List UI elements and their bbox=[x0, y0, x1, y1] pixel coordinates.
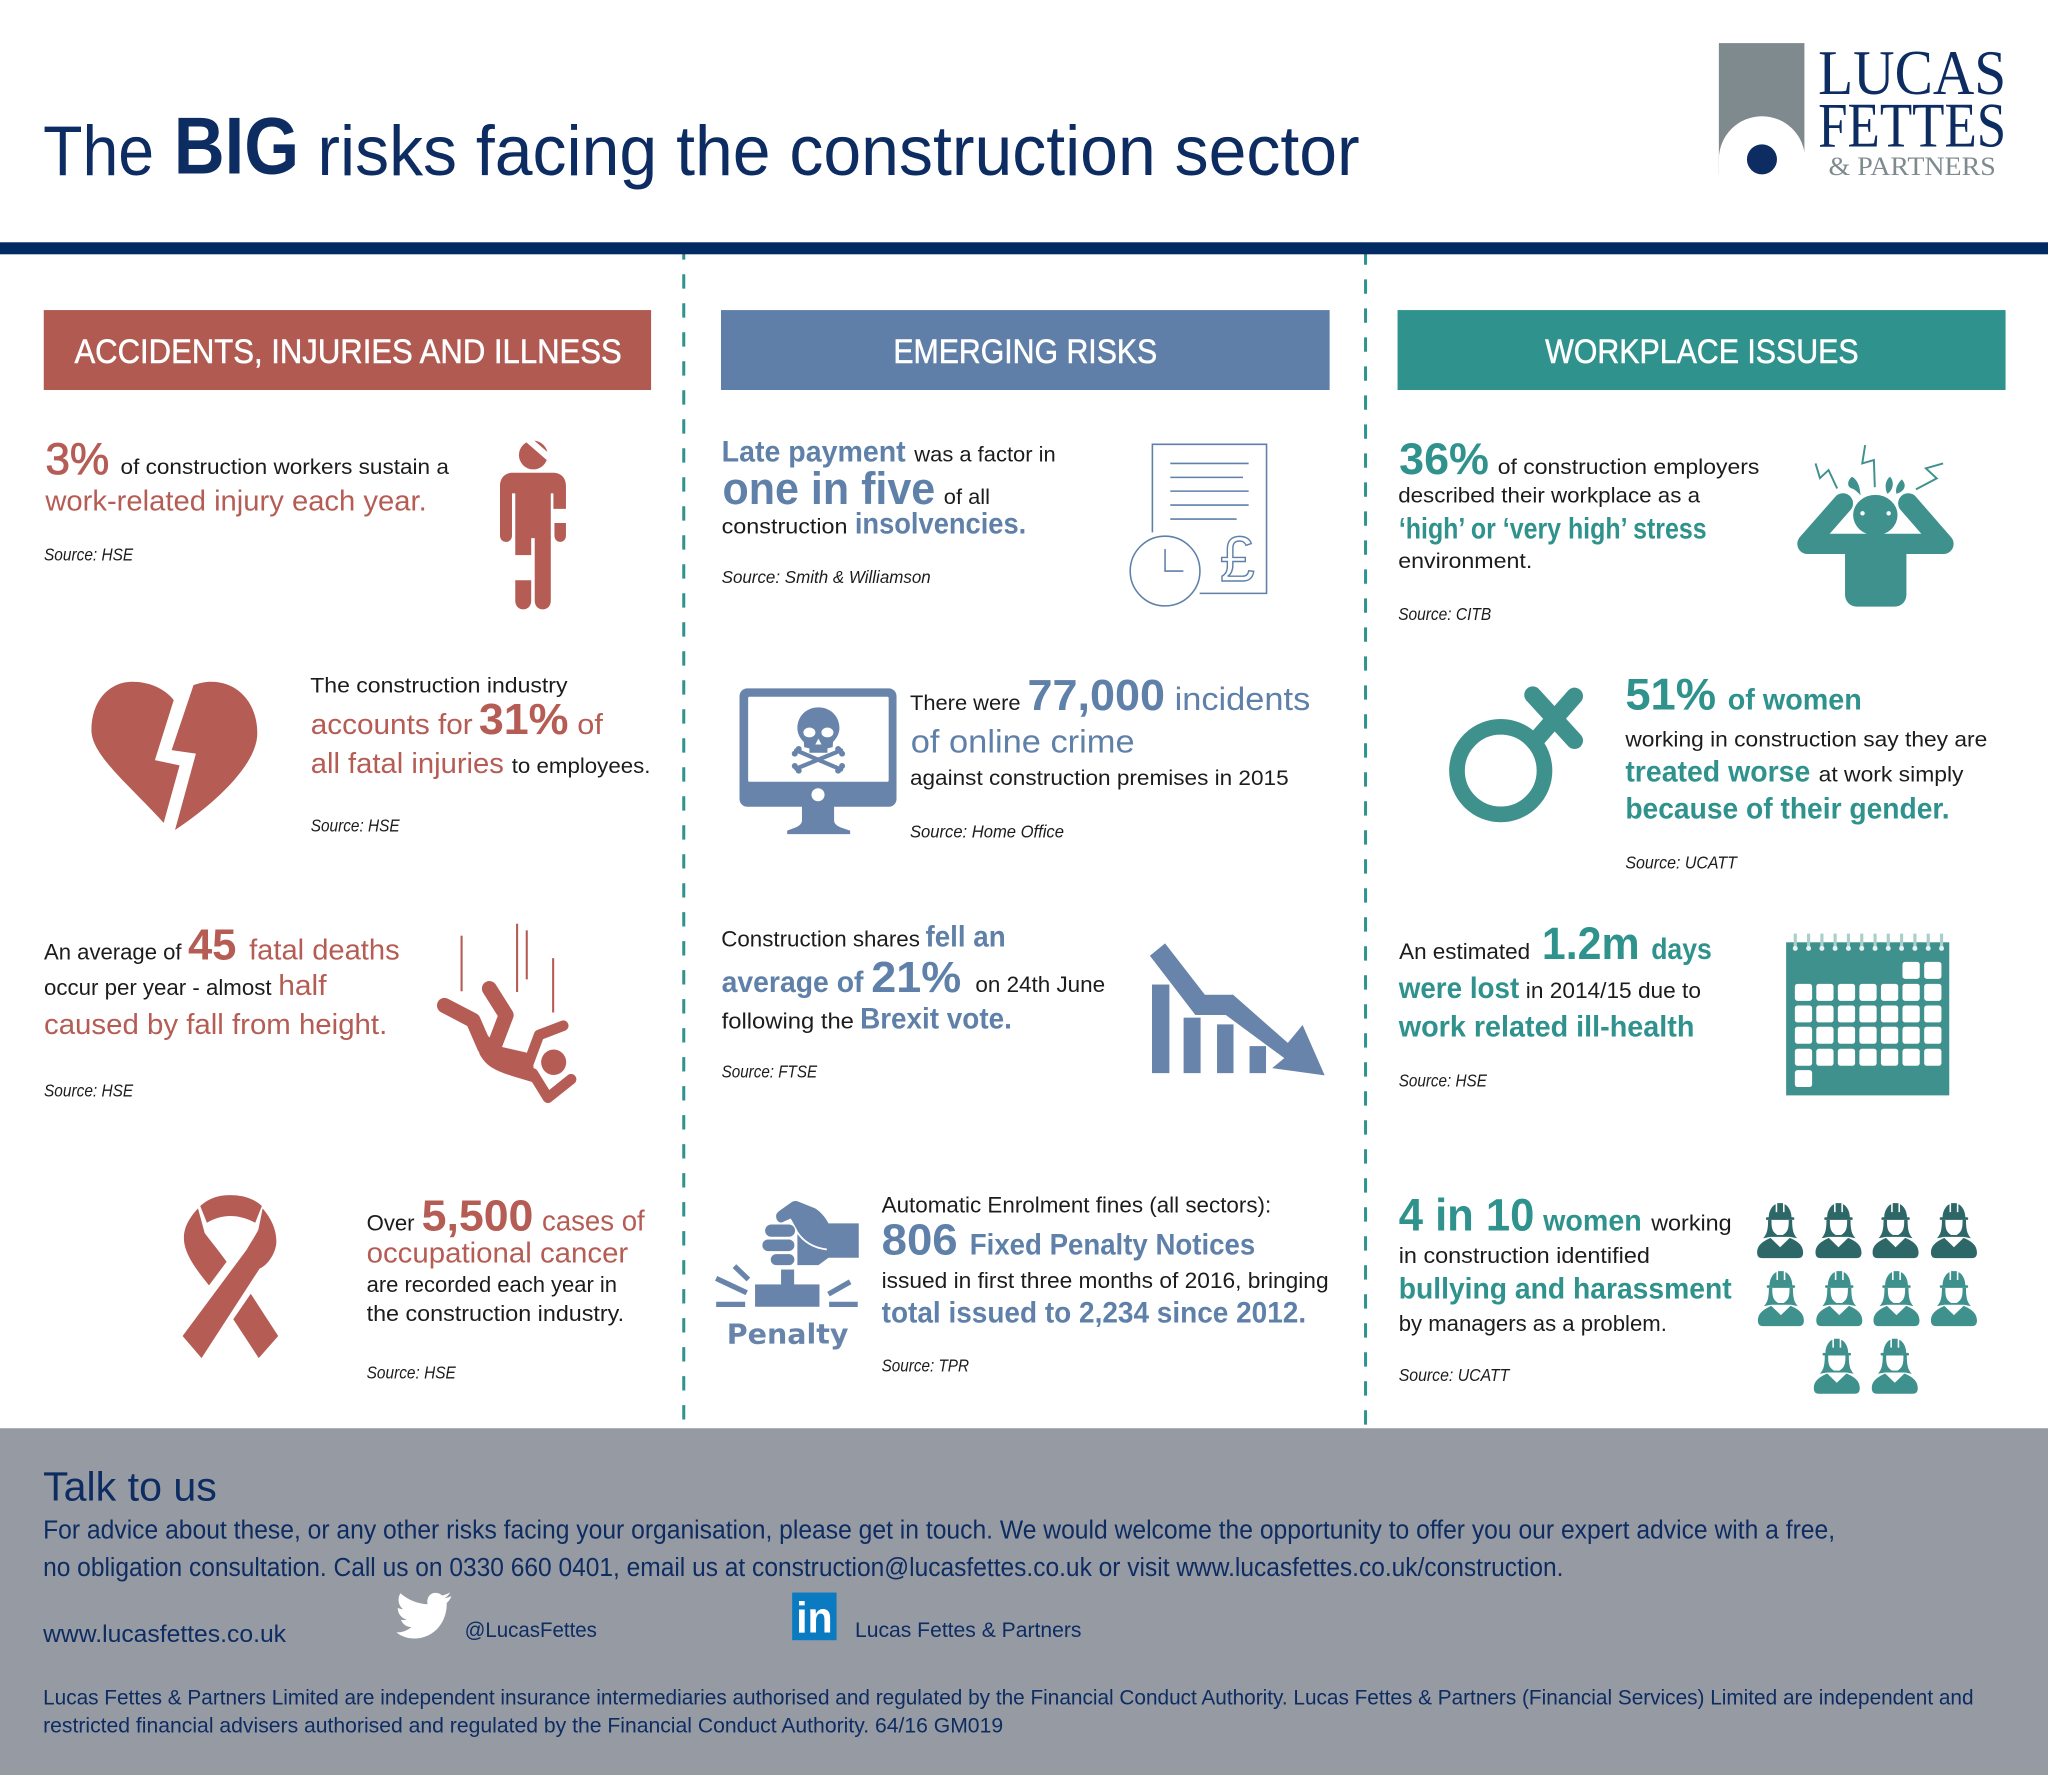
icon: twitter bird bbox=[396, 1593, 452, 1639]
panel: workplace issues bbox=[1398, 310, 2006, 1394]
stat: 1.2m days lost: in 2014/15 due to bbox=[1526, 978, 1701, 1003]
stat: 36% high stress: ‘high’ or ‘very high’ stress bbox=[1399, 512, 1707, 545]
stat: 5,500 cancer cases: Source: HSE bbox=[367, 1362, 456, 1382]
stat: 5,500 cancer cases: cases of bbox=[542, 1205, 646, 1238]
stat: late payment bbox=[722, 436, 1056, 587]
navy divider bar bbox=[0, 242, 2048, 254]
stat: 77,000 online crime: 77,000 bbox=[1028, 672, 1165, 720]
stat: 51% of women bbox=[1624, 670, 1987, 872]
stat: 21% share fall: 21% bbox=[871, 954, 961, 1002]
linkedin name: Lucas Fettes & Partners bbox=[855, 1617, 1081, 1642]
stat: late payment: construction bbox=[722, 513, 848, 538]
stat: 21% share fall: average of bbox=[722, 966, 864, 999]
stat: 3% injury: work-related injury each year. bbox=[44, 486, 427, 518]
icon: falling bar chart with arrow bbox=[1150, 943, 1325, 1075]
stat: 4 in 10 women: in construction identified bbox=[1399, 1243, 1650, 1268]
title: risks facing the construction sector bbox=[317, 111, 1360, 190]
heading: workplace issues: WORKPLACE ISSUES bbox=[1545, 333, 1859, 371]
stat: 77,000 online crime: Source: Home Office bbox=[910, 821, 1064, 841]
column divider left bbox=[683, 245, 685, 1428]
stat: 3% injury: 3% bbox=[45, 435, 109, 484]
stat: 1.2m days lost: An estimated bbox=[1399, 939, 1530, 964]
icon: broken heart bbox=[91, 682, 257, 830]
stat: 4 in 10 women bbox=[1399, 1191, 1732, 1385]
icon: falling person bbox=[444, 924, 571, 1098]
icon: female symbol bbox=[1457, 695, 1575, 814]
stat: 4 in 10 women: working bbox=[1650, 1210, 1732, 1236]
logo: Lucas Fettes & Partners: LUCAS bbox=[1818, 37, 2006, 108]
stat: 45 fatal deaths: 45 bbox=[188, 921, 236, 970]
stat: 36% high stress: described their workplace as a bbox=[1398, 483, 1700, 508]
contact paragraph bbox=[43, 1516, 1835, 1582]
stat: 4 in 10 women: bullying and harassment bbox=[1399, 1272, 1732, 1305]
stat: late payment: Source: Smith & Williamson bbox=[722, 567, 931, 587]
stat: 4 in 10 women: women bbox=[1542, 1204, 1642, 1238]
heading: accidents: ACCIDENTS, INJURIES AND ILLNESS bbox=[74, 333, 622, 371]
icon: awareness ribbon bbox=[183, 1195, 278, 1358]
stat: 36% high stress: 36% bbox=[1399, 435, 1489, 484]
stat: 51% of women: of women bbox=[1728, 683, 1862, 716]
icon: linkedin: in bbox=[796, 1595, 833, 1643]
stat: 5,500 cancer cases: Over bbox=[367, 1210, 415, 1236]
stat: 4 in 10 women: by managers as a problem. bbox=[1399, 1311, 1667, 1336]
stat: 36% high stress: Source: CITB bbox=[1398, 604, 1491, 624]
stat: 1.2m days lost: were lost bbox=[1398, 972, 1519, 1005]
icon: injured man bbox=[500, 437, 566, 609]
stat: 21% share fall: Construction shares bbox=[721, 926, 920, 951]
stat: 36% high stress: environment. bbox=[1398, 548, 1532, 573]
stat: 45 fatal deaths: An average of bbox=[44, 939, 183, 965]
stat: 77,000 online crime bbox=[910, 672, 1310, 841]
contact paragraph: no obligation consultation. Call us on 0330 660 0401, email us at construction@lucasfettes.co.uk or visit www.lucasfettes.co.uk/construction. bbox=[43, 1554, 1563, 1582]
stat: 45 fatal deaths: occur per year - almost bbox=[44, 975, 272, 1000]
stat: 806 fixed penalty notices: issued in first three months of 2016, bringing bbox=[882, 1268, 1329, 1293]
stat: late payment: was a factor in bbox=[913, 442, 1056, 467]
stat: 45 fatal deaths: caused by fall from height. bbox=[44, 1009, 387, 1041]
contact paragraph: For advice about these, or any other risks facing your organisation, please get in touch. We would welcome the opportunity to offer you our expert advice with a free, bbox=[43, 1516, 1835, 1544]
icon: stressed person bbox=[1807, 445, 1944, 607]
stat: 36% high stress: of construction employers bbox=[1498, 454, 1759, 479]
stat: 31% fatal injuries: of bbox=[577, 709, 604, 741]
stat: 51% of women: 51% bbox=[1625, 670, 1716, 719]
stat: 1.2m days lost: Source: HSE bbox=[1399, 1071, 1487, 1091]
stat: 21% share fall: Brexit vote. bbox=[860, 1002, 1012, 1035]
title bbox=[43, 102, 1360, 192]
stat: 77,000 online crime: incidents bbox=[1175, 680, 1310, 717]
stat: 21% share fall: fell an bbox=[926, 920, 1006, 953]
stat: 31% fatal injuries: all fatal injuries bbox=[311, 748, 504, 780]
stat: 1.2m days lost: work related ill-health bbox=[1398, 1010, 1694, 1043]
stat: 5,500 cancer cases bbox=[367, 1192, 646, 1382]
stat: 1.2m days lost bbox=[1398, 920, 1712, 1091]
stat: 31% fatal injuries: Source: HSE bbox=[311, 816, 400, 836]
stat: 45 fatal deaths: Source: HSE bbox=[44, 1081, 133, 1101]
icon: penalty stamp: Penalty bbox=[727, 1319, 849, 1350]
icon: calendar bbox=[1786, 934, 1949, 1095]
stat: 1.2m days lost: days bbox=[1651, 933, 1712, 966]
stat: 806 fixed penalty notices: 806 bbox=[882, 1216, 958, 1264]
stat: 806 fixed penalty notices: Automatic Enrolment fines (all sectors): bbox=[882, 1193, 1271, 1218]
stat: 51% of women: working in construction say they are bbox=[1624, 727, 1987, 752]
stat: 3% injury bbox=[44, 435, 449, 565]
stat: 5,500 cancer cases: are recorded each year in bbox=[367, 1272, 617, 1297]
stat: 4 in 10 women: 4 in 10 bbox=[1399, 1191, 1534, 1241]
heading: accidents bbox=[44, 310, 651, 390]
stat: 31% fatal injuries bbox=[310, 673, 650, 836]
legal disclaimer bbox=[43, 1684, 1974, 1738]
stat: 45 fatal deaths bbox=[44, 921, 400, 1101]
stat: 77,000 online crime: of online crime bbox=[911, 723, 1135, 760]
stat: 31% fatal injuries: to employees. bbox=[512, 753, 650, 778]
icon: monitor with skull bbox=[740, 688, 897, 834]
stat: 3% injury: Source: HSE bbox=[44, 545, 133, 565]
stat: late payment: insolvencies. bbox=[855, 507, 1026, 540]
heading: emerging risks: EMERGING RISKS bbox=[893, 333, 1157, 371]
stat: 5,500 cancer cases: the construction industry. bbox=[367, 1301, 624, 1326]
stat: 51% of women: because of their gender. bbox=[1625, 792, 1950, 825]
heading: talk to us: Talk to us bbox=[43, 1464, 217, 1510]
stat: 21% share fall bbox=[721, 920, 1105, 1082]
stat: 3% injury: of construction workers sustain a bbox=[121, 454, 449, 479]
stat: 36% high stress bbox=[1398, 435, 1759, 624]
stat: 31% fatal injuries: The construction industry bbox=[310, 673, 568, 698]
panel: emerging risks bbox=[716, 310, 1330, 1375]
title: BIG bbox=[174, 102, 299, 192]
twitter handle: @LucasFettes bbox=[465, 1617, 597, 1642]
stat: late payment: one in five bbox=[723, 463, 935, 514]
logo: Lucas Fettes & Partners: & PARTNERS bbox=[1829, 152, 1996, 181]
stat: late payment: of all bbox=[944, 484, 990, 509]
panel: talk to us footer bbox=[0, 1428, 2048, 1775]
stat: 31% fatal injuries: 31% bbox=[479, 696, 569, 744]
title: The bbox=[43, 111, 154, 190]
icon: ten women in hard hats bbox=[1757, 1203, 1977, 1394]
stat: 4 in 10 women: Source: UCATT bbox=[1399, 1365, 1510, 1385]
stat: 806 fixed penalty notices bbox=[882, 1193, 1329, 1375]
stat: 806 fixed penalty notices: Fixed Penalty Notices bbox=[970, 1228, 1255, 1261]
stat: 51% of women: at work simply bbox=[1819, 762, 1964, 787]
legal disclaimer: Lucas Fettes & Partners Limited are independent insurance intermediaries authorised and regulated by the Financial Conduct Authority. Lucas Fettes & Partners (Financial Services) Limited are independent and bbox=[43, 1684, 1974, 1709]
stat: 77,000 online crime: There were bbox=[910, 690, 1021, 715]
stat: 45 fatal deaths: fatal deaths bbox=[249, 934, 400, 967]
stat: 45 fatal deaths: half bbox=[278, 970, 328, 1002]
icon: penalty stamp bbox=[716, 1201, 859, 1350]
column divider right bbox=[1364, 250, 1367, 1428]
stat: 806 fixed penalty notices: Source: TPR bbox=[882, 1355, 969, 1375]
stat: 21% share fall: following the bbox=[722, 1008, 854, 1033]
logo: Lucas Fettes & Partners bbox=[1719, 37, 2006, 181]
stat: 806 fixed penalty notices: total issued to 2,234 since 2012. bbox=[882, 1296, 1306, 1330]
stat: 5,500 cancer cases: occupational cancer bbox=[367, 1237, 629, 1269]
stat: 31% fatal injuries: accounts for bbox=[311, 709, 473, 741]
stat: 21% share fall: on 24th June bbox=[975, 972, 1105, 997]
heading: emerging risks bbox=[721, 310, 1330, 390]
stat: 21% share fall: Source: FTSE bbox=[722, 1061, 817, 1082]
stat: 1.2m days lost: 1.2m bbox=[1542, 920, 1640, 969]
heading: workplace issues bbox=[1398, 310, 2006, 390]
stat: 51% of women: Source: UCATT bbox=[1625, 852, 1738, 872]
website link: www.lucasfettes.co.uk bbox=[42, 1621, 287, 1648]
panel: accidents, injuries and illness bbox=[44, 310, 651, 1382]
logo: Lucas Fettes & Partners: FETTES bbox=[1818, 89, 2006, 160]
stat: 77,000 online crime: against construction premises in 2015 bbox=[910, 765, 1289, 790]
stat: 51% of women: treated worse bbox=[1625, 756, 1810, 789]
stat: late payment: Late payment bbox=[722, 436, 906, 469]
stat: 5,500 cancer cases: 5,500 bbox=[422, 1192, 533, 1241]
legal disclaimer: restricted financial advisers authorised and regulated by the Financial Conduct Authority. 64/16 GM019 bbox=[43, 1713, 1003, 1738]
icon: invoice with clock and pound: £ bbox=[1220, 523, 1255, 595]
icon: invoice with clock and pound bbox=[1130, 444, 1267, 606]
